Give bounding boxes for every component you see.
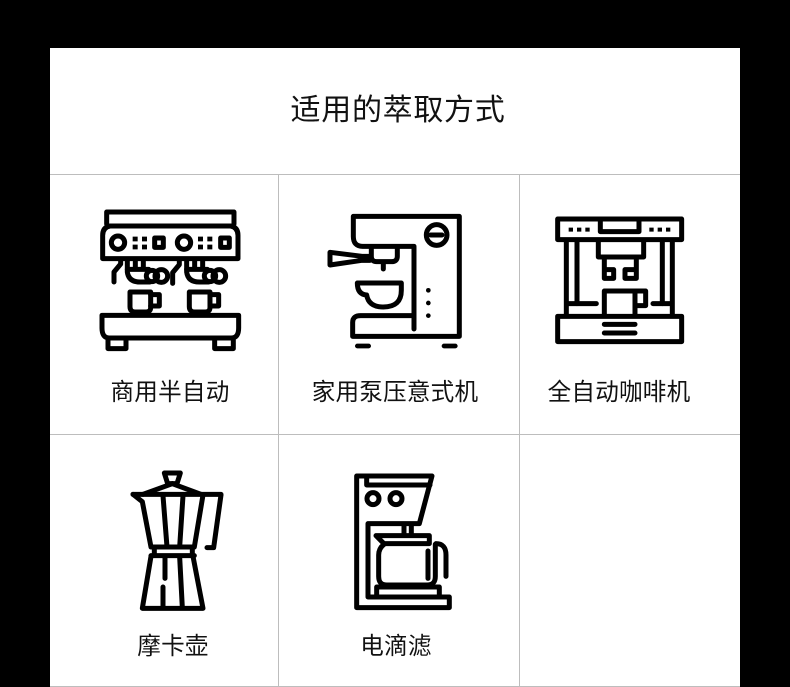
icon: commercial espresso machine (102, 212, 239, 349)
title: 适用的萃取方式 (291, 94, 505, 127)
label: electric drip: 电滴滤 (360, 634, 432, 660)
icon: home pump espresso machine (330, 216, 459, 346)
icon: fully automatic coffee machine (558, 219, 682, 342)
icon: electric drip coffee maker (357, 476, 449, 608)
label: fully automatic coffee machine: 全自动咖啡机 (548, 380, 690, 406)
label: commercial semi-automatic: 商用半自动 (111, 380, 229, 406)
label: moka pot: 摩卡壶 (137, 634, 209, 660)
label: home pump espresso: 家用泵压意式机 (312, 380, 478, 406)
icon: moka pot (133, 473, 221, 608)
